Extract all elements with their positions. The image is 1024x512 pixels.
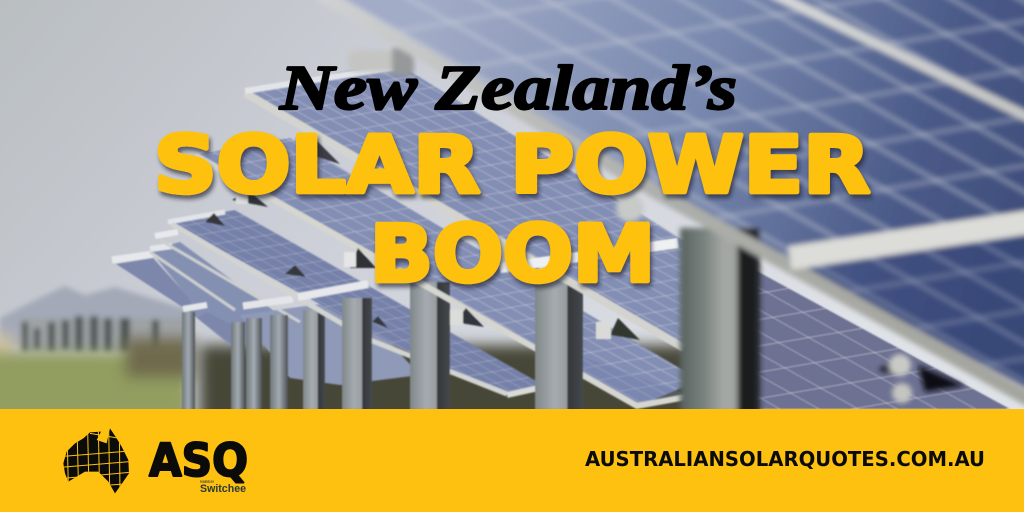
footer band: [63, 428, 984, 494]
title: BOOM: BOOM: [370, 210, 655, 300]
title: New Zealand's: New Zealand’s: [279, 53, 737, 123]
distant hazy panel rows and posts: [0, 286, 190, 352]
logo wordmark: ASQ: ASQ: [149, 434, 248, 487]
fourth panel row: [170, 210, 545, 395]
dark ground under the array: [194, 333, 684, 409]
title: SOLAR POWER: SOLAR POWER: [154, 121, 870, 211]
support post A: [342, 298, 372, 410]
support post B: [410, 282, 450, 410]
third panel row: [195, 138, 700, 407]
large foreground solar panel: [320, 0, 1024, 418]
far solar panel rows: [112, 62, 1010, 410]
lip near first post: [298, 284, 368, 297]
support post C: [535, 262, 583, 410]
website URL: AUSTRALIANSOLARQUOTES.COM.AU: [585, 447, 985, 471]
logo sub-brand: Switchee: Switchee: [200, 483, 246, 495]
grass field: [0, 335, 195, 422]
second panel row: [253, 70, 684, 342]
logo sub-brand: Switchee: POWERED BY: [200, 480, 214, 484]
support posts, far: [182, 312, 195, 410]
top blurred clamp: [348, 46, 414, 76]
lower right panel: [755, 270, 1010, 409]
mounting clamps: [205, 136, 640, 340]
icon: Australia map with solar grid: [63, 428, 129, 494]
